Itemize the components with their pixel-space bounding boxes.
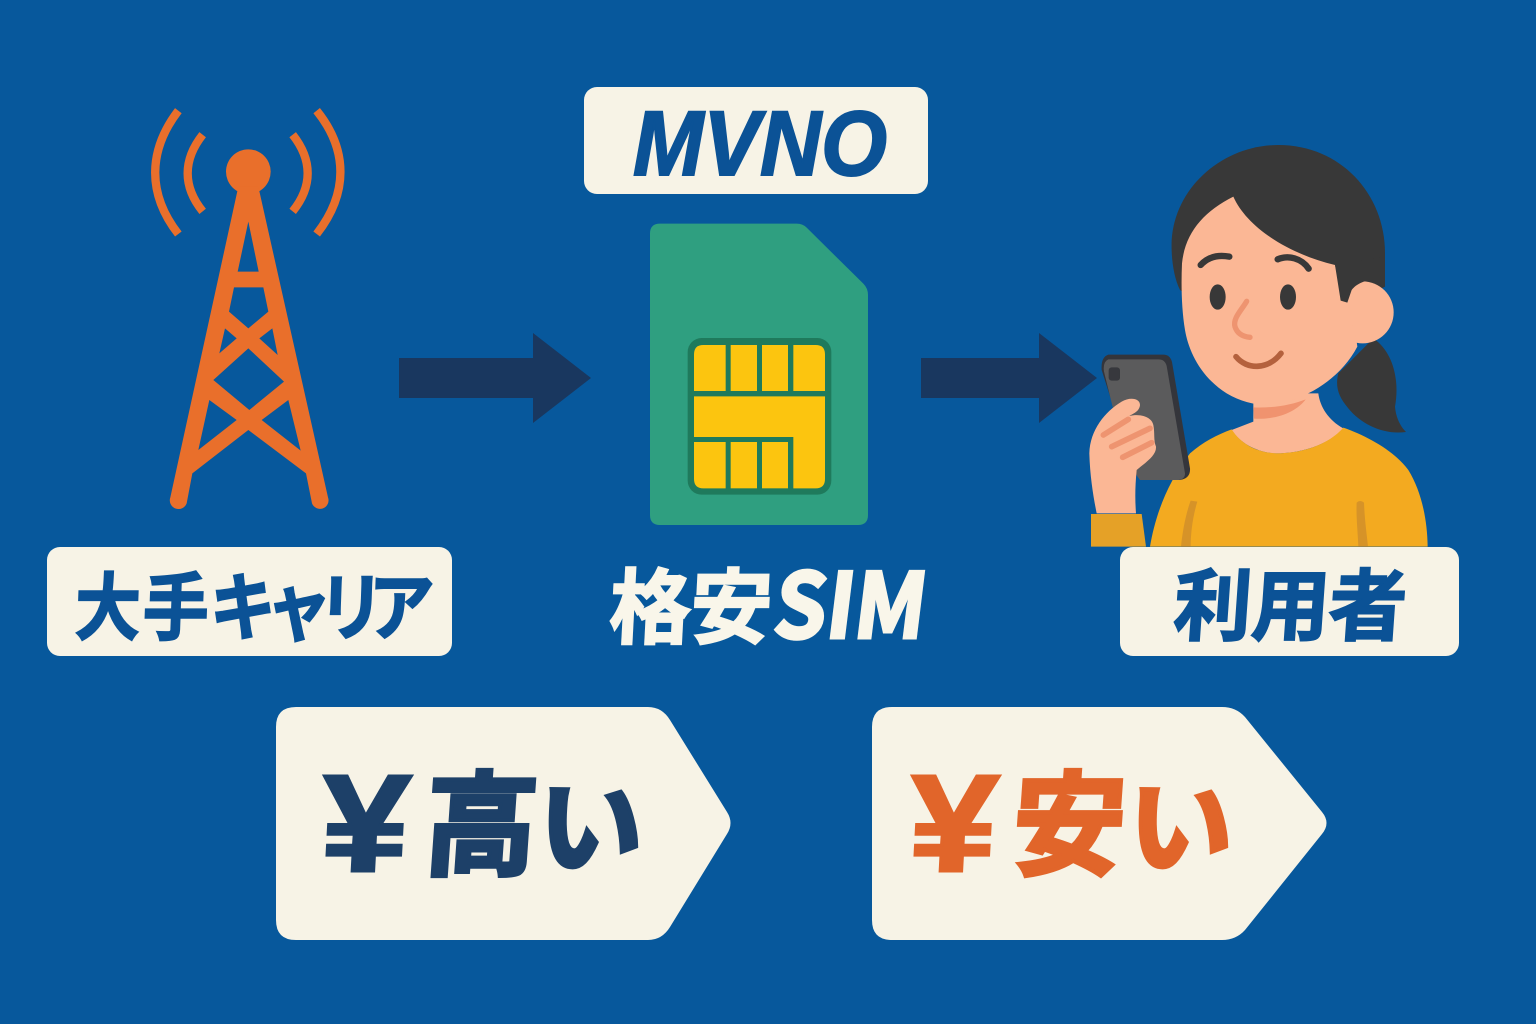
price tag: expensive: い — [533, 742, 650, 896]
eyebrows — [1201, 256, 1309, 269]
neck — [1232, 393, 1343, 453]
price tag: cheap: 安 — [1008, 735, 1132, 899]
price tag: cheap — [872, 707, 1326, 940]
label: major carrier: 大手キャリア — [73, 550, 436, 656]
arrow: carrier to SIM — [399, 333, 591, 423]
label: budget SIM — [607, 534, 936, 665]
sweater — [1150, 428, 1428, 547]
price tag: expensive: 高 — [420, 735, 544, 899]
price tag: cheap: ¥ — [905, 747, 1002, 901]
price tag: cheap: い — [1123, 742, 1240, 896]
ponytail — [1337, 338, 1406, 433]
ear — [1332, 281, 1394, 343]
hair — [1172, 145, 1385, 330]
hand — [1089, 399, 1156, 513]
price tag: expensive: ¥ — [317, 747, 414, 901]
face — [1182, 197, 1357, 405]
label: user: 利用者 — [1170, 544, 1411, 657]
arrow: SIM to user — [921, 333, 1097, 423]
phone — [1102, 355, 1190, 480]
mouth — [1236, 353, 1281, 366]
price tag: expensive — [276, 707, 730, 940]
label: budget SIM: SIM — [768, 534, 936, 665]
nose — [1235, 301, 1250, 337]
icon: radio tower — [155, 111, 340, 509]
cuff — [1091, 514, 1146, 547]
label: MVNO: MVNO — [633, 93, 887, 195]
eyes — [1210, 284, 1226, 310]
illustration: user with smartphone — [1089, 145, 1428, 547]
label: budget SIM: 格安 — [607, 542, 776, 661]
icon: SIM card — [650, 224, 868, 525]
